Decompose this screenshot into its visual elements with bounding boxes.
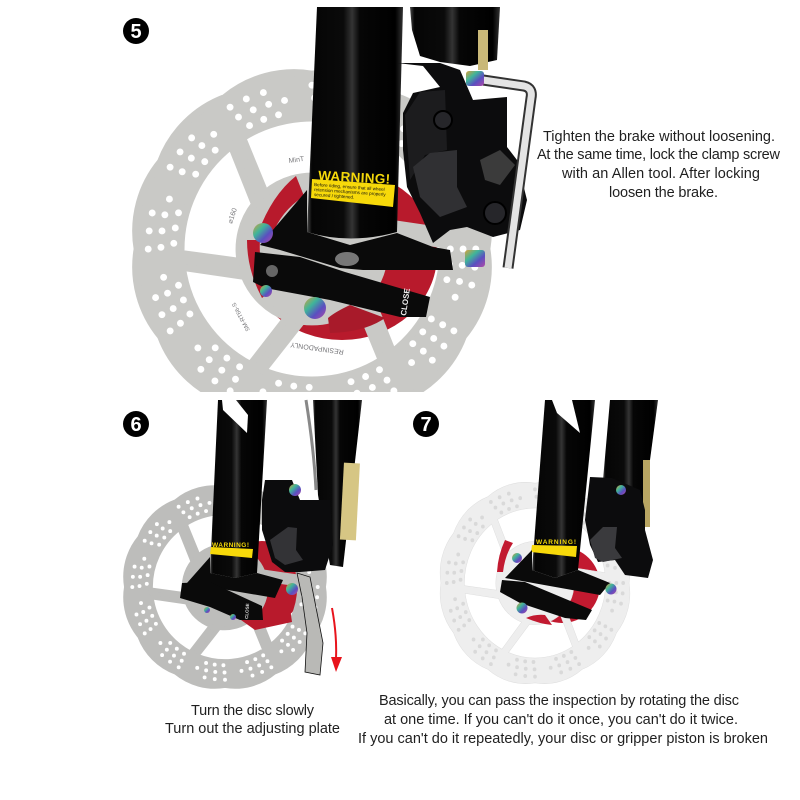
quick release lever: CLOSE — [244, 603, 250, 619]
brake rotor disc: RESINPADONLY — [290, 340, 344, 355]
allen key — [483, 80, 531, 268]
brake rotor disc — [125, 487, 325, 687]
brake caliper — [397, 63, 527, 243]
instruction text step 5: At the same time, lock the clamp screw — [537, 147, 781, 163]
panel: step 5 tighten brake — [123, 7, 781, 425]
panel: step 6 turn the disc — [123, 400, 362, 737]
red arrow — [331, 608, 342, 672]
panel: step 7 inspection — [358, 400, 768, 747]
step number 5: 5 — [130, 21, 142, 43]
brake rotor disc — [136, 73, 488, 425]
fork tubes — [210, 400, 362, 578]
instruction text step 7: at one time. If you can't do it once, you can't do it twice. — [384, 712, 738, 728]
instruction text step 5: with an Allen tool. After locking — [561, 166, 760, 182]
warning sticker — [531, 539, 577, 557]
caliper cover — [270, 527, 303, 565]
warning sticker — [210, 542, 253, 558]
spinning blurred rotor disc — [440, 482, 630, 684]
fork tubes — [532, 400, 658, 578]
brake rotor disc: MinT — [288, 156, 305, 165]
caliper cover — [590, 527, 622, 562]
bolts — [204, 484, 301, 620]
instruction text step 6: Turn the disc slowly — [191, 703, 315, 719]
bolts — [512, 485, 626, 614]
warning sticker: secured / tightened. — [314, 192, 355, 200]
fork dropout — [187, 557, 283, 598]
infographic canvas — [123, 7, 780, 746]
instruction text step 6 — [165, 703, 340, 737]
step number 6 — [123, 411, 149, 437]
quick release lever — [180, 582, 263, 620]
instruction text step 7 — [358, 693, 768, 747]
fork dropout — [505, 550, 610, 595]
step number 6: 6 — [130, 414, 142, 436]
quick release lever — [253, 252, 430, 317]
warning sticker: retension mechanisms are properly — [314, 187, 387, 197]
instruction text step 7: If you can't do it repeatedly, your disc or gripper piston is broken — [358, 731, 768, 747]
step number 7: 7 — [420, 414, 432, 436]
instruction text step 5: Tighten the brake without loosening. — [543, 129, 775, 145]
quick release lever — [500, 580, 592, 620]
axle nut — [335, 252, 359, 266]
bolts — [253, 71, 485, 319]
warning sticker: WARNING! — [318, 168, 391, 187]
step number 5 — [123, 18, 149, 44]
instruction text step 7: Basically, you can pass the inspection by rotating the disc — [379, 693, 739, 709]
warning sticker: WARNING! — [212, 542, 249, 549]
adjusting plate — [297, 573, 323, 675]
instruction text step 5 — [537, 129, 781, 201]
instruction text step 6: Turn out the adjusting plate — [165, 721, 340, 737]
suspension fork tubes — [307, 7, 500, 238]
step number 7 — [413, 411, 439, 437]
fork dropout — [260, 190, 453, 270]
brake caliper — [585, 477, 653, 578]
brake caliper — [262, 480, 333, 572]
quick release lever: CLOSE — [399, 287, 412, 316]
warning sticker — [311, 168, 395, 207]
warning sticker: WARNING! — [536, 539, 576, 546]
allen key highlight — [483, 80, 531, 268]
brake rotor disc: SM-RT66-S — [232, 301, 252, 332]
brake rotor disc: ⌀160 — [227, 207, 239, 225]
warning sticker: Before riding, ensure that all wheel — [314, 182, 385, 192]
instruction text step 5: loosen the brake. — [609, 185, 718, 201]
